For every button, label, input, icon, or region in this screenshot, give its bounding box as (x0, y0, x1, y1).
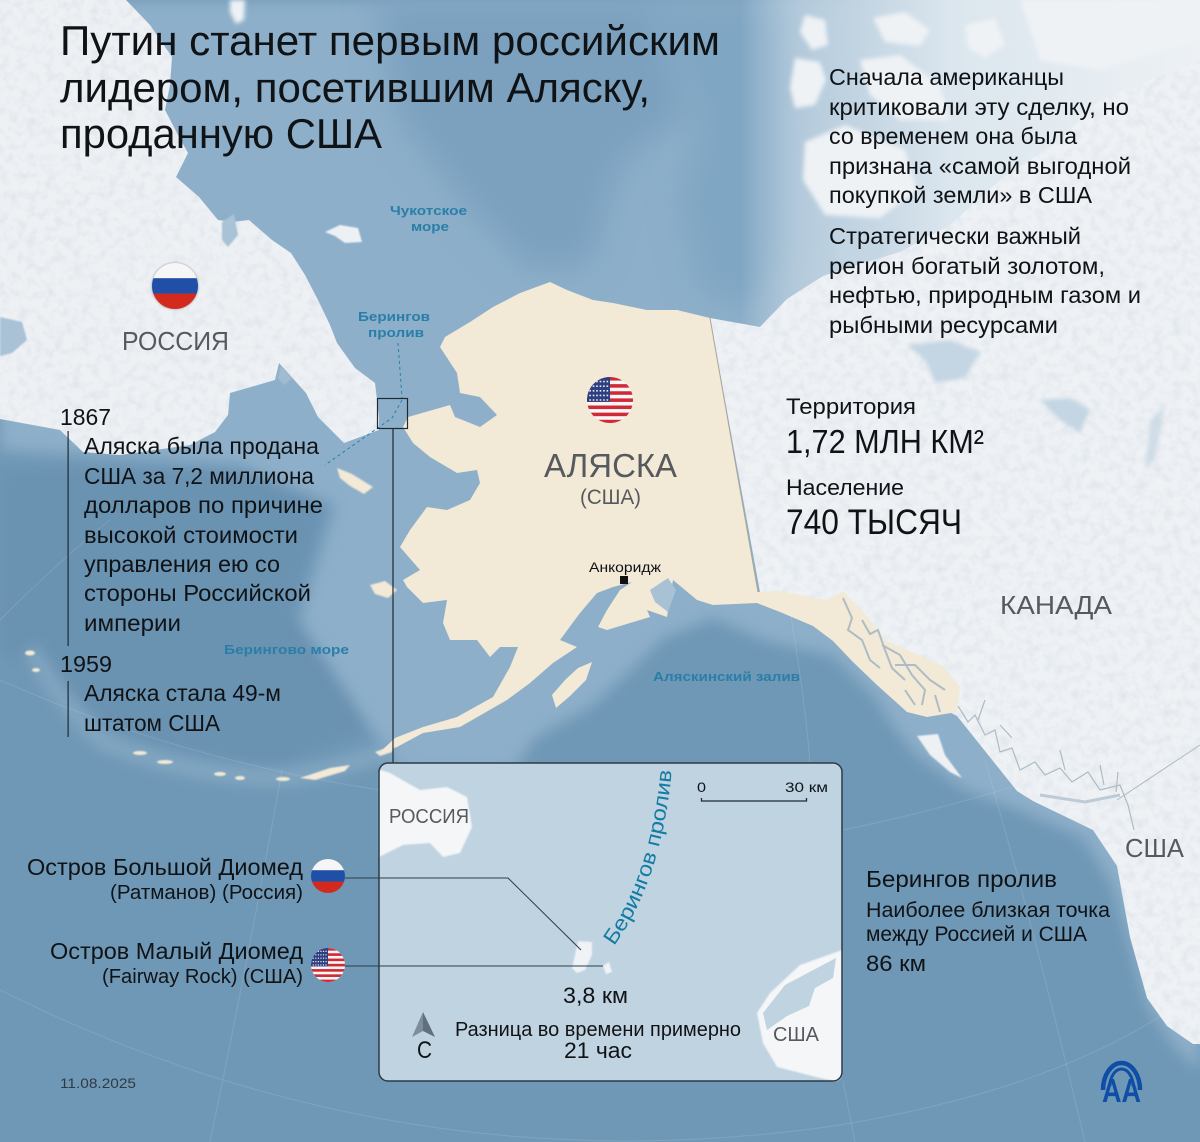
inset islands: Diomede (572, 941, 612, 974)
label: Alaska with flag: АЛЯСКА (544, 447, 677, 484)
inset frame (379, 763, 842, 1081)
land: Alaska (380, 282, 960, 752)
time difference note (455, 1019, 741, 1063)
distance label: 3,8 км (563, 983, 628, 1008)
timeline: 1867: Аляска была продана (84, 433, 319, 459)
time difference note: 21 час (564, 1038, 632, 1063)
callout: Little Diomede (50, 938, 345, 988)
timeline: 1867: высокой стоимости (84, 522, 298, 548)
Prince William Sound (650, 578, 676, 612)
statistic: population: 740 ТЫСЯЧ (786, 503, 962, 542)
label: Anchorage (589, 559, 662, 584)
callout: Little Diomede: (Fairway Rock) (США) (102, 966, 303, 988)
scale bar (697, 779, 828, 801)
text block: strategic resources: Стратегически важный (829, 223, 1081, 249)
label: USA mainland: США (1125, 833, 1185, 863)
text block: Bering Strait facts: 86 км (866, 951, 926, 976)
title: лидером, посетившим Аляску, (60, 64, 650, 111)
timeline: 1959: штатом США (84, 710, 221, 736)
sea label: Gulf of Alaska: Аляскинский залив (653, 669, 800, 684)
label: Russia with flag: РОССИЯ (122, 326, 229, 356)
text block: American reaction: признана «самой выгодной (829, 153, 1131, 179)
statistic: population: Население (786, 475, 904, 500)
text block: American reaction: Сначала американцы (829, 64, 1064, 90)
text block: strategic resources: рыбными ресурсами (829, 312, 1058, 338)
callout: Big Diomede (27, 854, 345, 904)
north arrow (412, 1012, 435, 1064)
sea label: Chukchi Sea: Чукотское (390, 203, 467, 218)
inset label: USA: США (773, 1024, 820, 1046)
dashed strait line (325, 343, 402, 465)
text block: Bering Strait facts: Наиболее близкая точка (866, 899, 1110, 922)
statistic: territory (786, 394, 984, 460)
statistic: population (786, 475, 962, 542)
statistic: territory: Территория (786, 394, 916, 419)
date: 11.08.2025 (60, 1075, 136, 1091)
deep Bering basin (0, 470, 372, 770)
label: Canada: КАНАДА (1000, 590, 1113, 620)
sea label: Chukchi Sea: море (411, 219, 449, 234)
inset land: Russia (379, 770, 472, 857)
Arctic islands (230, 0, 1200, 218)
Canadian lakes (830, 225, 1165, 470)
timeline: 1867 (60, 404, 323, 646)
text block: American reaction: со временем она была (829, 123, 1077, 149)
logo: Anadolu Agency: AA (1102, 1072, 1141, 1109)
label: Russia with flag (122, 262, 229, 356)
callout: Little Diomede: Остров Малый Диомед (50, 938, 304, 964)
inset land: USA (757, 950, 842, 1081)
title (60, 17, 720, 157)
panel: Bering Strait inset map (345, 762, 843, 1082)
title: Путин станет первым российским (60, 17, 720, 64)
locator box and connector (378, 398, 408, 763)
sea label: Chukchi Sea (390, 203, 467, 234)
Arctic deep water (375, 0, 690, 270)
sea label: Bering Sea: Берингово море (224, 642, 349, 657)
text block: American reaction: покупкой земли» в США (829, 182, 1093, 208)
timeline: 1959 (60, 651, 281, 737)
water inside Russia (0, 214, 292, 385)
leader lines (345, 878, 603, 966)
graticule (0, 520, 1170, 1142)
text block: Bering Strait facts: Берингов пролив (866, 866, 1057, 892)
islands in Bering Sea (25, 225, 962, 781)
text block: Bering Strait facts (866, 866, 1110, 976)
time difference note: Разница во времени примерно (455, 1019, 741, 1041)
timeline: 1867: США за 7,2 миллиона (84, 463, 314, 489)
text block: American reaction (829, 64, 1131, 208)
sea label: Bering Strait (358, 309, 430, 340)
text block: strategic resources: нефтью, природным газом и (829, 282, 1141, 308)
text block: American reaction: критиковали эту сделку, но (829, 94, 1129, 120)
label: Alaska with flag: (США) (580, 486, 641, 509)
scale bar: 30 км (785, 779, 828, 795)
inset label: Russia: РОССИЯ (389, 806, 469, 828)
timeline: 1867: стороны Российской (84, 580, 311, 606)
sea label: Bering Strait: Берингов (358, 309, 430, 324)
text block: strategic resources: регион богатый золотом, (829, 253, 1105, 279)
callout: Big Diomede: (Ратманов) (Россия) (110, 882, 303, 904)
timeline: 1867: империи (84, 610, 181, 636)
callout: Big Diomede: Остров Большой Диомед (27, 854, 304, 880)
timeline: 1959: 1959 (60, 651, 112, 677)
label: Anchorage: Анкоридж (589, 559, 662, 575)
panhandle inlets (843, 598, 945, 712)
sea label: Bering Strait: пролив (368, 325, 424, 340)
inset lagoon (763, 958, 836, 1030)
title: проданную США (60, 110, 382, 157)
panel: Bering Strait inset map: Берингов пролив (603, 771, 672, 944)
land: Canada and western USA (710, 60, 1200, 1044)
BC coast fjords and border (958, 700, 1200, 830)
text block: strategic resources (829, 223, 1141, 338)
Kodiak island (552, 662, 592, 708)
logo: Anadolu Agency (1102, 1063, 1141, 1109)
statistic: territory: 1,72 МЛН КМ² (786, 423, 984, 460)
timeline: 1867: долларов по причине (84, 492, 323, 518)
north arrow: С (417, 1037, 432, 1064)
land: Russia (0, 0, 379, 455)
label: Alaska with flag (544, 377, 677, 509)
scale bar: 0 (697, 779, 706, 795)
curved label: Bering Strait (614, 768, 672, 946)
text block: Bering Strait facts: между Россией и США (866, 923, 1087, 946)
timeline: 1959: Аляска стала 49-м (84, 680, 281, 706)
timeline: 1867: 1867 (60, 404, 111, 430)
pale Arctic Archipelago water (700, 0, 1200, 345)
Aleutian ridge (30, 650, 395, 778)
timeline: 1867: управления ею со (84, 551, 280, 577)
